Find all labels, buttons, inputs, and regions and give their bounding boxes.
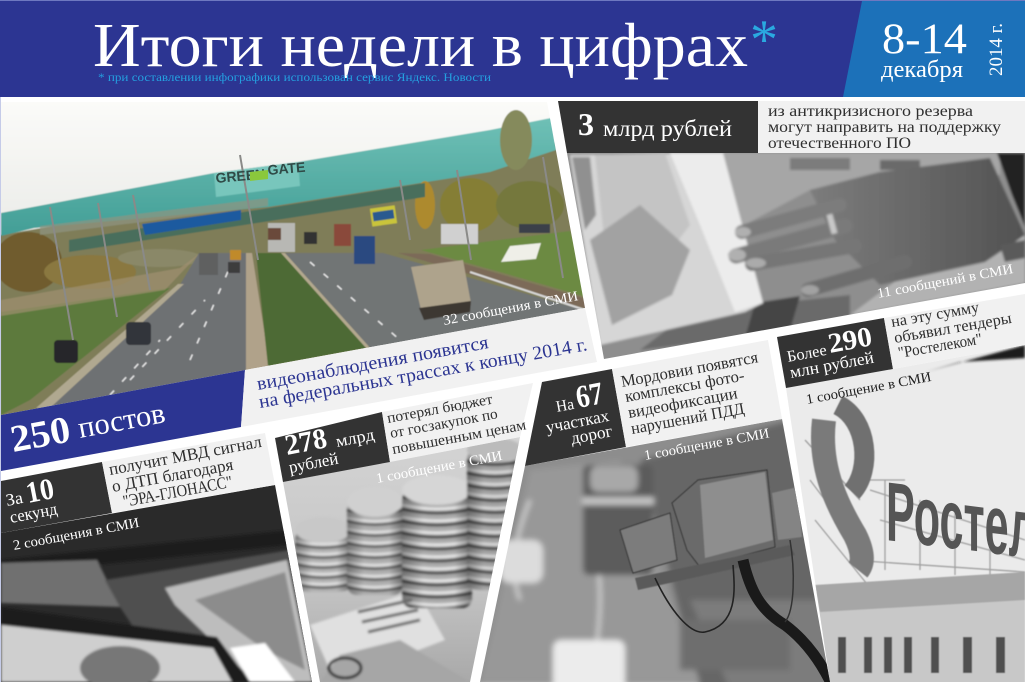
media count: Mordovia: 1 сообщение в СМИ	[643, 426, 771, 464]
caption: road	[241, 308, 597, 427]
caption: road: на федеральных трассах к концу 2014 г.	[257, 334, 589, 413]
caption: Rostelecom: объявил тендеры	[893, 310, 1013, 347]
caption: software funding	[758, 101, 1025, 153]
vehicles	[411, 260, 471, 310]
panel: state procurement	[275, 383, 533, 682]
stat block: 250 постов: 250	[7, 409, 74, 461]
media count: road: 32 сообщения в СМИ	[442, 289, 579, 329]
stat block: 278 млрд рублей: рублей	[287, 449, 340, 477]
stat block: 278 млрд рублей: млрд	[334, 425, 376, 451]
month: декабря	[881, 57, 963, 83]
panel: Rostelecom tenders	[777, 294, 1025, 682]
media count: Rostelecom: 1 сообщение в СМИ	[805, 370, 933, 408]
photo: highway	[0, 100, 600, 420]
stat block: за 10 секунд: секунд	[8, 499, 59, 527]
media count: funding: 11 сообщений в СМИ	[876, 262, 1014, 302]
photo: highway: GATE	[267, 159, 306, 178]
caption: software funding: из антикризисного резерва	[768, 103, 973, 120]
panel: software funding	[558, 101, 1025, 370]
photo: banknotes and hand	[560, 150, 1025, 370]
stat block: за 10 секунд	[1, 462, 112, 533]
bridge	[69, 183, 425, 252]
caption: Rostelecom	[884, 294, 1025, 369]
stat block: на 67 участках дорог: 67	[573, 375, 606, 415]
stat block: 3 млрд рублей: млрд рублей	[603, 116, 732, 141]
media count: ERA-GLONASS: 2 сообщения в СМИ	[12, 516, 141, 554]
stat block: 278 млрд рублей	[275, 412, 390, 482]
date panel	[843, 1, 1025, 97]
stat block: за 10 секунд: 10	[23, 472, 57, 510]
trees	[0, 232, 62, 292]
sign text on building: GREEN	[215, 166, 266, 186]
caption: Rostelecom: на эту сумму	[890, 299, 980, 331]
stat block: более 290 млн рублей: 290	[826, 321, 875, 360]
caption: Mordovia: видеофиксации	[626, 383, 739, 422]
stat block: за 10 секунд: За	[4, 488, 25, 510]
lamp posts	[50, 155, 563, 340]
photo: map screens	[0, 480, 320, 682]
road right	[285, 253, 590, 350]
caption: procurement: повышенным ценам	[391, 417, 528, 458]
caption: Mordovia: комплексы фото-	[623, 366, 746, 406]
year: 2014 г.	[986, 23, 1007, 76]
panel: Mordovia cameras	[470, 340, 840, 682]
title: Итоги недели в цифрах	[93, 12, 748, 80]
data source note: * при составлении инфографики использован сервис Яндекс. Новости	[98, 70, 492, 84]
caption: software funding: могут направить на поддержку	[768, 119, 1001, 136]
title asterisk: *	[750, 9, 778, 71]
caption: ERA-GLONASS: получит МВД сигнал	[107, 432, 264, 479]
stat block: на 67 участках дорог	[525, 369, 626, 466]
caption: software funding: отечественного ПО	[768, 135, 911, 152]
photo: coin stacks	[280, 435, 525, 682]
caption: procurement: от госзакупок по	[389, 406, 499, 442]
photo: Rostelecom building	[780, 340, 1025, 682]
caption: procurement	[382, 383, 533, 462]
caption: Mordovia	[612, 340, 782, 447]
stat block: более 290 млн рублей: Более	[786, 342, 828, 366]
stat block: 278 млрд рублей: 278	[282, 422, 330, 462]
panel: ERA-GLONASS	[0, 432, 320, 682]
scaffolding	[805, 440, 1025, 600]
stat block: 250 постов: постов	[75, 396, 168, 445]
date range: 8-14	[882, 16, 967, 63]
road left	[54, 252, 246, 405]
caption: procurement: потерял бюджет	[386, 392, 494, 427]
road markings	[110, 262, 400, 395]
stat block: на 67 участках дорог: участках	[544, 406, 611, 437]
building	[1, 118, 556, 236]
caption: ERA-GLONASS: "ЭРА-ГЛОНАСС"	[121, 472, 234, 511]
median	[256, 253, 371, 366]
stat block: более 290 млн рублей: млн рублей	[788, 348, 875, 382]
caption: ERA-GLONASS: о ДТП благодаря	[110, 455, 235, 496]
photo: traffic camera	[470, 415, 840, 682]
stat block: 250 постов	[1, 370, 245, 471]
stat block: 3 млрд рублей	[558, 101, 758, 153]
caption: road: видеонаблюдения появится	[255, 332, 490, 395]
stat block: на 67 участках дорог: дорог	[569, 421, 614, 448]
caption: Rostelecom: "Ростелеком"	[897, 331, 983, 362]
caption: ERA-GLONASS	[102, 432, 275, 513]
stat block: более 290 млн рублей	[777, 318, 893, 388]
caption: Mordovia: нарушений ПДД	[629, 399, 746, 438]
stat block: 3 млрд рублей: 3	[578, 106, 594, 142]
panel: road cameras	[0, 100, 600, 471]
stat block: на 67 участках дорог: На	[555, 396, 575, 416]
media count: procurement: 1 сообщение в СМИ	[375, 449, 504, 487]
caption: Mordovia: Мордовии появятся	[619, 347, 760, 391]
left verge	[1, 288, 170, 415]
